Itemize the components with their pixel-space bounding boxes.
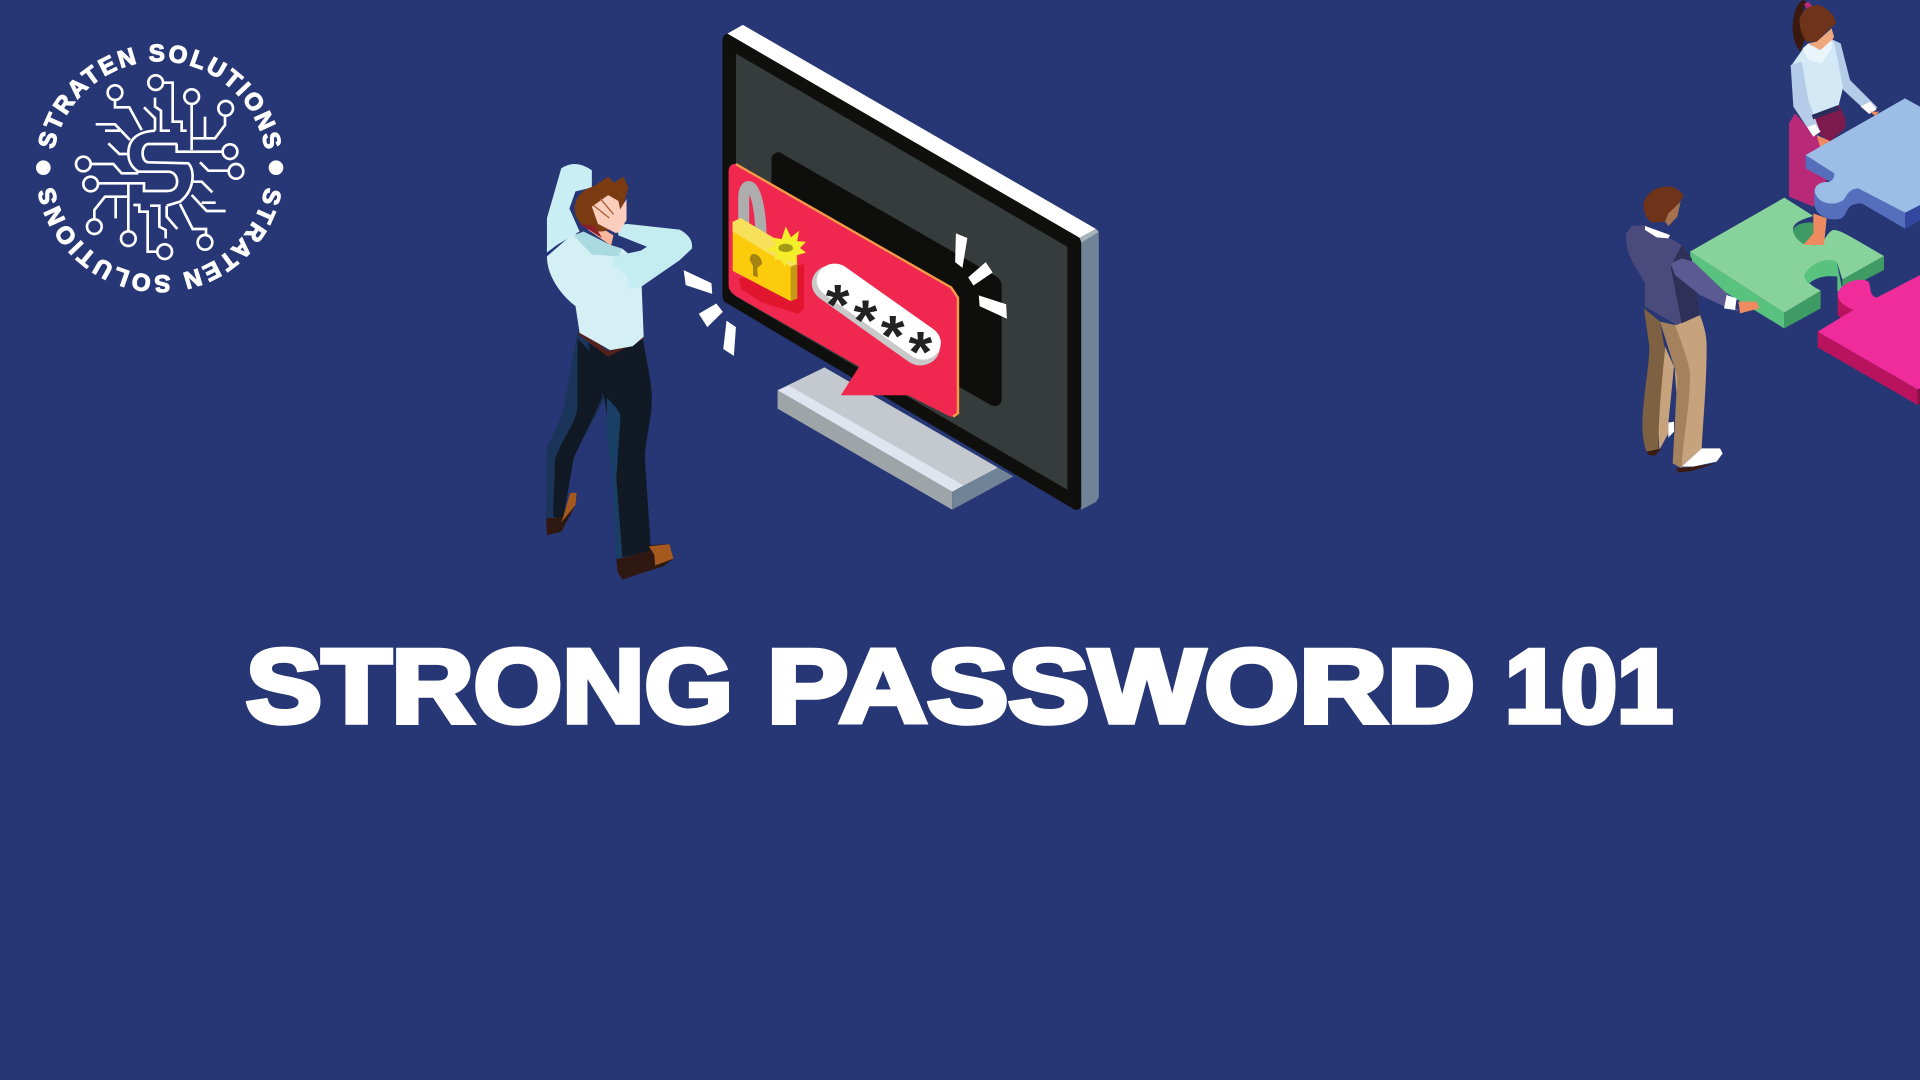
password field (826, 272, 933, 384)
woman figure (1789, 0, 1879, 207)
title (246, 629, 1673, 745)
logo ring dots (36, 160, 283, 175)
man shirt (547, 164, 692, 354)
title: 101 (1505, 629, 1673, 745)
padlock icon (733, 186, 804, 314)
password asterisks: * (853, 288, 878, 352)
monitor stand (778, 367, 1013, 510)
title: STRONG (246, 629, 733, 745)
password asterisks: * (826, 272, 850, 337)
magenta puzzle piece (1818, 275, 1920, 405)
alert rays left (684, 270, 736, 356)
man figure with sweater (1626, 187, 1759, 473)
stressed man figure (546, 164, 692, 580)
alert rays right (955, 233, 1007, 319)
password asterisks: * (909, 319, 933, 384)
logo: Straten Solutions (36, 44, 284, 293)
alert speech bubble (729, 164, 958, 417)
man trousers (546, 331, 652, 559)
blue puzzle piece (1806, 98, 1920, 229)
password asterisks (826, 272, 933, 384)
warning burst icon (766, 227, 806, 267)
monitor body (722, 25, 1099, 510)
man shoes (546, 493, 673, 580)
logo circuit S emblem (76, 75, 243, 259)
green puzzle piece (1690, 198, 1884, 328)
password asterisks: * (881, 303, 906, 368)
logo ring text: STRATEN SOLUTIONS STRATEN SOLUTIONS (38, 44, 281, 293)
illustration: team assembling puzzle (1626, 0, 1920, 473)
title: PASSWORD (767, 629, 1475, 745)
man head and hand (575, 177, 629, 246)
illustration: monitor with password alert (546, 25, 1099, 580)
woman's leg over puzzle (1803, 213, 1827, 245)
